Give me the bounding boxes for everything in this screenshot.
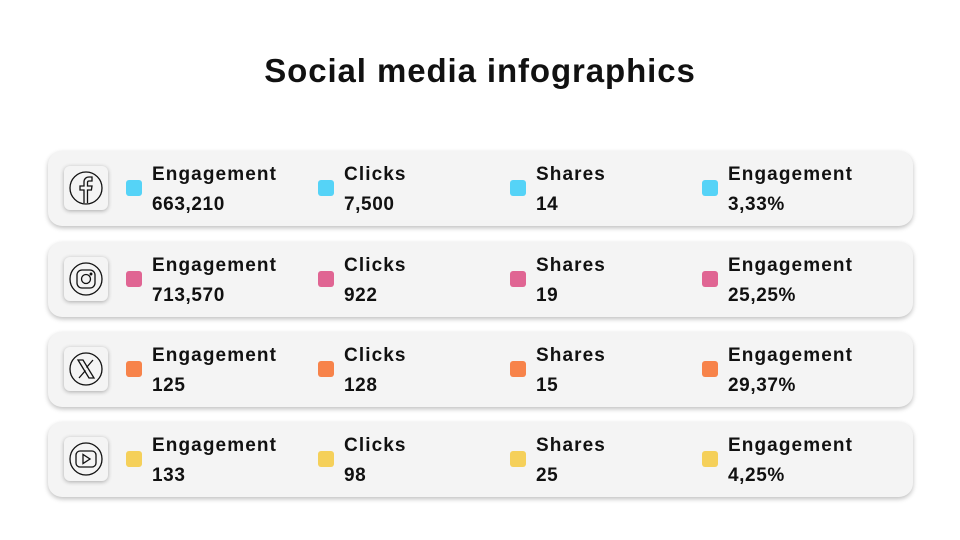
- item: engagement rate: 25,25%: [728, 285, 796, 306]
- item: clicks: 128: [344, 375, 378, 396]
- item: engagement rate: Engagement: [728, 435, 853, 456]
- panel: youtube row: [48, 422, 913, 497]
- item: shares: Shares: [536, 345, 606, 366]
- item: clicks: Clicks: [344, 164, 407, 185]
- item: shares: [510, 345, 606, 396]
- item: shares: Shares: [536, 164, 606, 185]
- icon: x: [64, 347, 108, 391]
- item: engagement rate: [702, 435, 853, 486]
- item: engagement: [126, 435, 277, 486]
- item: engagement rate: [702, 255, 853, 306]
- panel: x row: [48, 332, 913, 407]
- icon: youtube: [64, 437, 108, 481]
- icon: facebook: [64, 166, 108, 210]
- item: engagement rate: Engagement: [728, 255, 853, 276]
- item: engagement rate: Engagement: [728, 345, 853, 366]
- item: shares: 15: [536, 375, 558, 396]
- item: clicks: 922: [344, 285, 378, 306]
- item: engagement: 133: [152, 465, 186, 486]
- item: engagement: [126, 345, 277, 396]
- item: engagement rate: 29,37%: [728, 375, 796, 396]
- item: shares: 14: [536, 194, 558, 215]
- item: shares: [510, 255, 606, 306]
- item: engagement rate: 4,25%: [728, 465, 785, 486]
- item: clicks: Clicks: [344, 435, 407, 456]
- item: clicks: [318, 345, 407, 396]
- item: engagement rate: Engagement: [728, 164, 853, 185]
- item: clicks: [318, 255, 407, 306]
- item: shares: [510, 164, 606, 215]
- title: Social media infographics: [264, 52, 696, 89]
- item: engagement: 713,570: [152, 285, 225, 306]
- item: clicks: Clicks: [344, 345, 407, 366]
- item: engagement: 125: [152, 375, 186, 396]
- icon: instagram: [64, 257, 108, 301]
- item: shares: 19: [536, 285, 558, 306]
- item: engagement rate: [702, 164, 853, 215]
- item: engagement: Engagement: [152, 255, 277, 276]
- item: engagement: [126, 164, 277, 215]
- item: engagement: Engagement: [152, 435, 277, 456]
- item: engagement: 663,210: [152, 194, 225, 215]
- item: engagement rate: [702, 345, 853, 396]
- item: shares: 25: [536, 465, 558, 486]
- item: clicks: Clicks: [344, 255, 407, 276]
- item: clicks: 98: [344, 465, 366, 486]
- item: engagement: Engagement: [152, 345, 277, 366]
- item: engagement rate: 3,33%: [728, 194, 785, 215]
- item: clicks: [318, 164, 407, 215]
- item: engagement: [126, 255, 277, 306]
- item: shares: [510, 435, 606, 486]
- panel: facebook row: [48, 151, 913, 226]
- item: shares: Shares: [536, 255, 606, 276]
- item: engagement: Engagement: [152, 164, 277, 185]
- panel: instagram row: [48, 242, 913, 317]
- item: shares: Shares: [536, 435, 606, 456]
- item: clicks: 7,500: [344, 194, 395, 215]
- item: clicks: [318, 435, 407, 486]
